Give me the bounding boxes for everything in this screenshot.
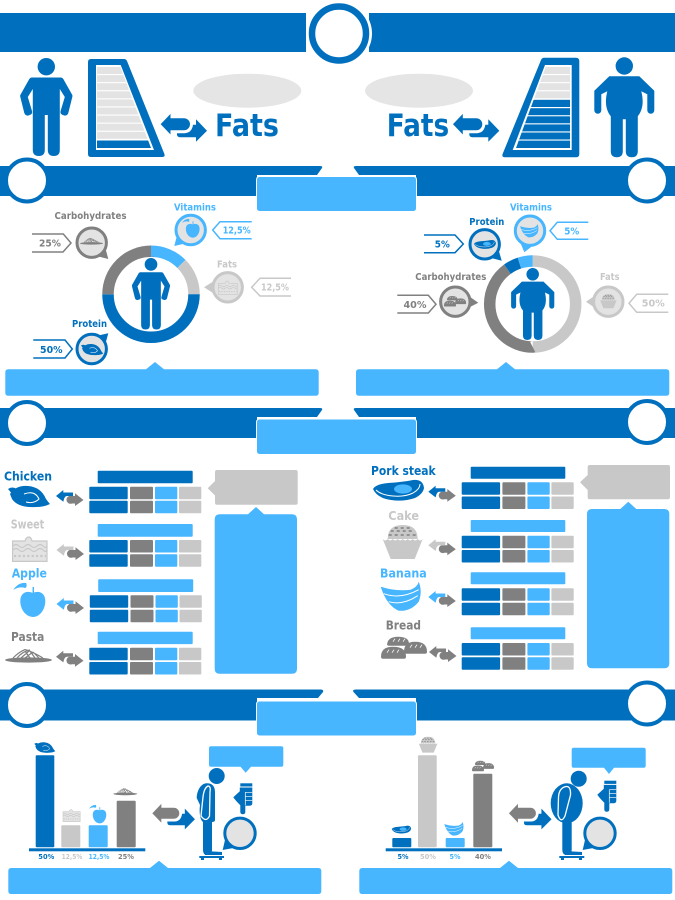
callout: vitamins 12,5% — [174, 203, 252, 246]
arrows: chart to person — [152, 803, 195, 829]
panel: normal summary — [8, 742, 321, 894]
food row: sweet: Sweet — [11, 517, 45, 531]
callout: fats 50%: Fats — [600, 272, 620, 283]
food row: apple — [12, 566, 202, 622]
bar chart: normal diet — [29, 742, 145, 861]
top header band — [0, 0, 675, 66]
food row: chicken: Chicken — [4, 470, 52, 484]
callout: vitamins 5%: 5% — [564, 227, 579, 238]
placeholder ellipse right — [365, 74, 473, 108]
gauge: high fat level — [502, 58, 579, 157]
food row: chicken — [4, 470, 201, 513]
gray note box — [208, 470, 298, 505]
panel: normal diet donut — [5, 203, 319, 396]
icon: slim person — [20, 58, 72, 156]
callout: vitamins 5%: Vitamins — [510, 203, 552, 214]
panel: overweight summary — [359, 737, 672, 894]
callout: fats 50%: 50% — [642, 299, 665, 310]
placeholder ellipse — [193, 74, 301, 108]
callout: fats 50% — [586, 272, 668, 316]
text box below donut — [5, 362, 319, 396]
bar chart: overweight diet — [386, 737, 502, 861]
callout: protein 5% — [424, 217, 504, 261]
bar chart: overweight diet: 50% — [420, 853, 436, 861]
callout: carbohydrates 40% — [397, 272, 486, 316]
food row: pasta — [5, 630, 201, 674]
callout: carbohydrates 25% — [32, 211, 127, 259]
icon: pointing hand — [233, 783, 252, 814]
icon: fat person on scale side view — [551, 771, 587, 860]
icon: fat person — [594, 57, 654, 157]
bar chart: normal diet: 50% — [38, 853, 54, 861]
bar chart: normal diet: 12,5% — [89, 853, 109, 861]
bar chart: overweight diet: 40% — [475, 853, 491, 861]
callout: protein 50%: Protein — [72, 319, 107, 330]
heading: Fats: Fats — [215, 108, 279, 144]
callout: vitamins 12,5%: Vitamins — [174, 203, 216, 214]
heading: Fats right: Fats — [387, 108, 449, 144]
panel: overweight diet donut — [356, 203, 669, 396]
arrows: chart to fat person — [508, 803, 552, 829]
panel: foods left — [4, 470, 298, 674]
bar chart: overweight diet: 5% — [450, 853, 460, 861]
section band 3 — [0, 682, 675, 736]
tall blue text box — [215, 507, 297, 674]
callout: protein 50%: 50% — [40, 345, 63, 356]
donut chart: normal diet — [108, 251, 194, 337]
speech box — [209, 746, 283, 773]
arrows: fats to gauge — [452, 113, 499, 142]
icon: fat person in donut — [511, 268, 554, 340]
text box bottom left — [8, 861, 321, 894]
food row: pasta: Pasta — [11, 630, 44, 644]
food row: cake — [383, 509, 574, 562]
section band 1 — [0, 160, 675, 212]
icon: pointing hand right — [597, 781, 616, 812]
food row: pork steak: Pork steak — [371, 464, 437, 478]
bar chart: normal diet: 12,5% — [62, 853, 82, 861]
callout: fats 12,5%: 12,5% — [261, 283, 289, 294]
callout: vitamins 12,5%: 12,5% — [223, 226, 251, 237]
food row: sweet — [11, 517, 201, 567]
icon: slim person on scale side view — [197, 768, 225, 860]
callout: carbohydrates 40%: 40% — [404, 300, 426, 311]
callout: protein 50% — [33, 319, 108, 364]
callout: fats 12,5%: Fats — [217, 259, 237, 270]
callout: carbohydrates 25%: Carbohydrates — [54, 211, 127, 222]
panel: foods right — [371, 464, 670, 670]
gauge: low fat level — [88, 59, 165, 157]
tall blue text box right — [587, 502, 669, 668]
callout: fats 12,5% — [204, 259, 291, 302]
panel: slim person and fat gauge — [20, 58, 301, 157]
speech box right — [572, 748, 646, 774]
panel: fat person and full gauge — [365, 57, 654, 157]
gray note box right — [580, 465, 670, 499]
callout: vitamins 5% — [510, 203, 588, 252]
empty bubble right — [583, 818, 615, 850]
food row: cake: Cake — [388, 509, 419, 523]
food row: bread — [381, 618, 574, 670]
text box bottom right — [359, 861, 672, 894]
bar chart: overweight diet: 5% — [398, 853, 408, 861]
food row: apple: Apple — [12, 566, 47, 581]
section band 2 — [0, 401, 675, 454]
callout: carbohydrates 25%: 25% — [39, 239, 61, 250]
food row: banana — [380, 567, 574, 615]
text box below right donut — [356, 362, 669, 396]
food row: banana: Banana — [380, 567, 427, 581]
donut chart: overweight diet — [490, 261, 576, 347]
food row: bread: Bread — [386, 618, 421, 632]
arrows: gauge to fats — [160, 113, 207, 142]
empty bubble — [223, 818, 255, 850]
icon: slim person in donut — [132, 258, 170, 330]
food row: pork steak — [371, 464, 574, 509]
callout: protein 5%: Protein — [469, 217, 504, 228]
callout: carbohydrates 40%: Carbohydrates — [415, 272, 486, 283]
bar chart: normal diet: 25% — [118, 853, 134, 861]
callout: protein 5%: 5% — [435, 240, 450, 251]
